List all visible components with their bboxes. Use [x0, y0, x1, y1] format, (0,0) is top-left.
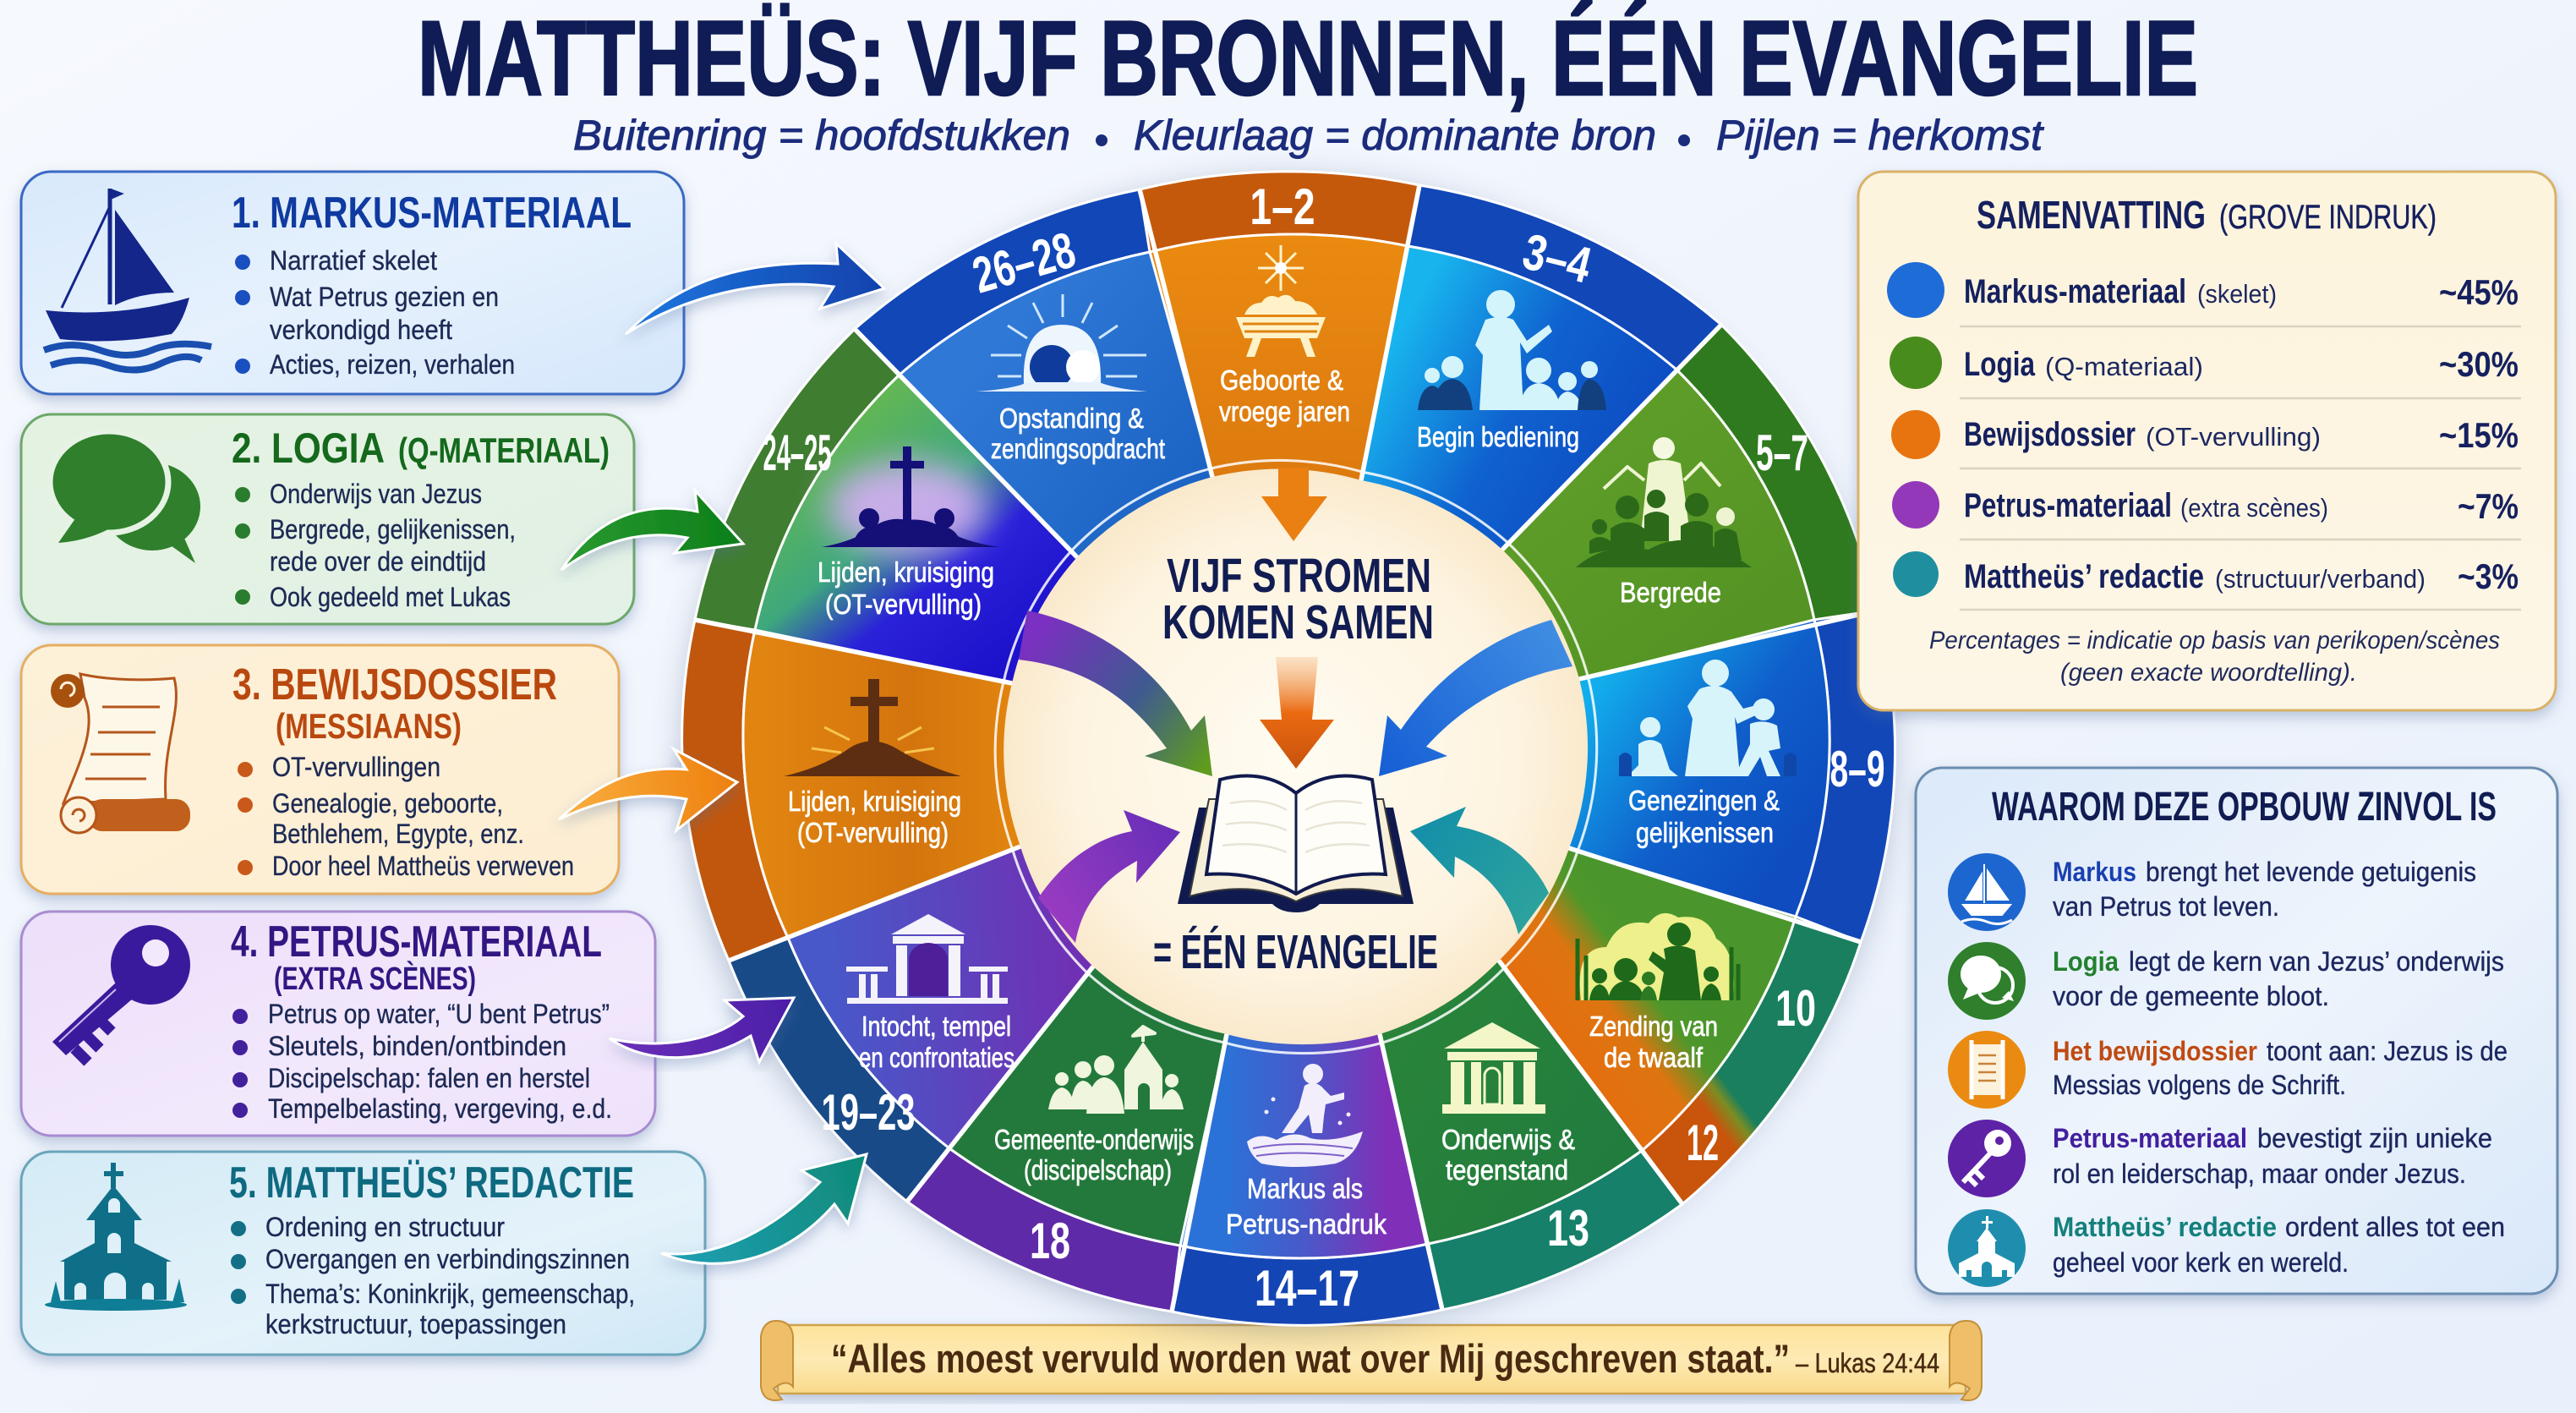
quote source: – Lukas 24:44 — [1796, 1348, 1939, 1378]
bullet list: Ook gedeeld met Lukas — [270, 582, 511, 612]
row: Markus: (skelet) — [2197, 279, 2277, 309]
segment: chapter 18: Gemeente-onderwijs — [994, 1124, 1194, 1155]
bullet list: Petrus op water, “U bent Petrus” — [268, 999, 610, 1029]
segment: chapter 20 (Lijden, orange): (OT-vervulling) — [797, 817, 949, 848]
segment: chapters 14-17: Petrus-nadruk — [1226, 1208, 1386, 1240]
icon: key — [52, 925, 190, 1062]
subtitle: Buitenring = hoofdstukken — [573, 112, 1070, 159]
panel heading: SAMENVATTING — [1977, 193, 2206, 237]
panel: waarom deze opbouw zinvol is — [1916, 768, 2557, 1294]
heading: 5. MATTHEÜS’ REDACTIE — [229, 1158, 634, 1208]
segment: chapters 19-23: Intocht, tempel — [861, 1010, 1011, 1042]
subtitle — [573, 112, 2044, 159]
bullet list — [235, 479, 516, 612]
panel: 5 Mattheüs' redactie — [21, 1152, 705, 1355]
row: Logia: (Q-materiaal) — [2045, 352, 2203, 381]
arrow: Petrus to wheel — [610, 998, 794, 1062]
row: Mattheüs: Mattheüs’ redactie — [1964, 558, 2204, 595]
segment: chapters 5-7: Bergrede — [1620, 577, 1721, 608]
reason: bewijsdossier: Het bewijsdossier — [2053, 1036, 2257, 1066]
note — [1929, 627, 2500, 687]
segment: chapters 10-12: 12 — [1687, 1115, 1719, 1171]
reason: Logia: voor de gemeente bloot. — [2053, 981, 2329, 1011]
bullet list: Overgangen en verbindingszinnen — [265, 1244, 630, 1274]
row: Bewijsdossier: (OT-vervulling) — [2146, 422, 2321, 452]
segment: chapter 13 — [1287, 750, 1682, 1310]
arrow: orange from top — [1261, 468, 1327, 541]
bullet list: Bergrede, gelijkenissen, — [270, 514, 516, 545]
icon: speech bubbles — [50, 431, 200, 563]
heading — [232, 424, 610, 472]
segment: chapter 13: 13 — [1547, 1200, 1589, 1257]
segment: chapters 8-9: Genezingen & — [1628, 785, 1780, 816]
segment: chapters 8-9 — [1287, 611, 1895, 942]
row: Petrus: Petrus-materiaal — [1964, 487, 2172, 524]
panel: 4 Petrus-materiaal — [21, 912, 655, 1136]
bullet list: kerkstructuur, toepassingen — [265, 1309, 566, 1339]
segment: chapters 24-25 — [695, 329, 1287, 750]
reason: Logia: Logia — [2053, 946, 2119, 977]
heading — [231, 917, 602, 997]
row: Logia — [1890, 337, 2519, 389]
bullet list: OT-vervullingen — [272, 752, 440, 782]
segment: chapter 20 (Lijden, orange): Lijden, kruisiging — [788, 786, 961, 817]
reason: Mattheüs: Mattheüs’ redactie — [2053, 1212, 2277, 1242]
bullet list: Acties, reizen, verhalen — [270, 349, 515, 380]
heading: 2. LOGIA — [232, 424, 385, 472]
row: Mattheüs: (structuur/verband) — [2215, 564, 2426, 594]
bullet list: verkondigd heeft — [270, 315, 452, 345]
segment: chapters 1-2: 1–2 — [1250, 178, 1315, 235]
segment: chapters 26-28: Opstanding & — [999, 403, 1144, 434]
arrow: Markus to wheel — [626, 244, 884, 334]
segment: chapters 1-2: vroege jaren — [1219, 396, 1350, 427]
reason: Logia — [1948, 942, 2504, 1020]
reason: Markus: brengt het levende getuigenis — [2146, 857, 2476, 887]
segment: chapter 13: Onderwijs & — [1441, 1124, 1575, 1155]
bullet list: Discipelschap: falen en herstel — [268, 1063, 590, 1093]
reason: bewijsdossier: Messias volgens de Schrift. — [2053, 1070, 2346, 1100]
segment: chapters 24-25: Lijden, kruisiging — [818, 556, 994, 588]
row: Bewijsdossier — [1891, 410, 2519, 459]
arrow: orange centre — [1260, 657, 1334, 769]
segment: chapters 8-9: 8–9 — [1829, 741, 1885, 797]
icon: teacher and listeners — [1418, 290, 1606, 410]
segment: chapter 20 (Lijden, orange) — [682, 620, 1287, 961]
icon: healing scene — [1619, 660, 1797, 776]
segment: chapters 26-28: zendingsopdracht — [991, 433, 1165, 464]
segment: chapters 1-2: Geboorte & — [1220, 364, 1343, 396]
heading: (MESSIAANS) — [276, 706, 462, 746]
row: Markus — [1887, 262, 2519, 318]
reason: Mattheüs — [1948, 1209, 2505, 1287]
subtitle: Kleurlaag = dominante bron — [1134, 112, 1656, 159]
bullet list: Thema’s: Koninkrijk, gemeenschap, — [265, 1279, 635, 1309]
icon: scroll — [51, 674, 190, 833]
segment: chapters 24-25: 24–25 — [763, 424, 832, 481]
segment: chapter 18 — [907, 750, 1287, 1312]
segment: chapter 13: tegenstand — [1446, 1154, 1568, 1186]
inner ring line — [995, 460, 1597, 1054]
bullet list: Genealogie, geboorte, — [272, 788, 503, 819]
reason: Mattheüs: geheel voor kerk en wereld. — [2053, 1247, 2349, 1278]
icon: empty tomb with rays — [976, 294, 1147, 392]
reason: Markus — [1948, 853, 2476, 931]
segment: chapters 24-25: (OT-vervulling) — [825, 589, 982, 620]
row: Petrus: (extra scènes) — [2180, 493, 2328, 523]
icon: temple entrance — [846, 914, 1008, 1004]
row: Petrus — [1892, 481, 2519, 529]
row: Markus: ~45% — [2439, 272, 2519, 312]
bullet list — [232, 999, 612, 1124]
panel heading — [1977, 193, 2437, 237]
icon: mission of the twelve — [1578, 913, 1738, 1000]
segment: chapters 3-4 — [1287, 185, 1721, 750]
bullet list: Sleutels, binden/ontbinden — [268, 1031, 566, 1061]
arrow: purple-green from upper left — [1019, 611, 1212, 776]
panel heading: (GROVE INDRUK) — [2219, 199, 2437, 236]
heading: (Q-MATERIAAL) — [398, 430, 610, 470]
bullet list: Bethlehem, Egypte, enz. — [272, 819, 524, 849]
reason: Markus: van Petrus tot leven. — [2053, 891, 2279, 922]
bullet list: rede over de eindtijd — [270, 546, 486, 577]
row: Logia: ~30% — [2439, 344, 2519, 384]
panel: 2 Logia — [21, 414, 634, 624]
segment: chapters 1-2 — [1140, 172, 1419, 750]
icon: cross with mourners — [822, 446, 1000, 554]
bullet list: Door heel Mattheüs verweven — [272, 851, 574, 881]
segment: chapters 19-23: 19–23 — [822, 1084, 915, 1141]
reason: bewijsdossier — [1948, 1031, 2508, 1109]
arrow: blue from upper right — [1379, 620, 1572, 776]
note: (geen exacte woordtelling). — [2060, 659, 2357, 687]
panel: samenvatting — [1858, 172, 2556, 710]
centre text: vijf stromen: VIJF STROMEN — [1167, 549, 1431, 603]
segment: chapters 14-17: Markus als — [1247, 1173, 1363, 1204]
reason: Mattheüs: ordent alles tot een — [2285, 1212, 2505, 1242]
row: Bewijsdossier: ~15% — [2439, 415, 2519, 455]
icon: Peter walking on water — [1247, 1064, 1363, 1167]
icon: sermon on the mount — [1576, 437, 1752, 567]
arrow: teal from lower right — [1410, 807, 1549, 934]
bullet list — [238, 752, 574, 881]
centre text: vijf stromen — [1162, 549, 1434, 649]
reason: Petrus — [1948, 1120, 2492, 1197]
row: Mattheüs — [1893, 551, 2519, 597]
bullet list: Onderwijs van Jezus — [270, 479, 482, 509]
segment: chapters 8-9: gelijkenissen — [1636, 817, 1774, 848]
reason: Petrus: bevestigt zijn unieke — [2257, 1123, 2492, 1153]
chapter wheel — [682, 172, 1895, 1328]
heading — [232, 660, 557, 746]
icon: star and manger — [1236, 245, 1326, 357]
bullet list — [231, 1212, 635, 1339]
segment: chapters 19-23: en confrontaties — [859, 1042, 1015, 1073]
row: Markus: Markus-materiaal — [1964, 273, 2186, 310]
segment: chapters 5-7: 5–7 — [1756, 424, 1808, 481]
centre text: vijf stromen: KOMEN SAMEN — [1162, 595, 1434, 649]
segment: chapter 18: 18 — [1030, 1213, 1070, 1269]
icon: temple — [1442, 1022, 1545, 1114]
segment: chapters 26-28: 26–28 — [966, 221, 1081, 304]
heading: 4. PETRUS-MATERIAAL — [231, 917, 602, 967]
bullet list: Ordening en structuur — [265, 1212, 505, 1242]
segment: chapters 14-17: 14–17 — [1255, 1260, 1359, 1317]
row: Bewijsdossier: Bewijsdossier — [1964, 416, 2136, 453]
arrow: purple from lower left — [1038, 810, 1180, 943]
centre text: één evangelie: = ÉÉN EVANGELIE — [1153, 925, 1438, 979]
heading: (EXTRA SCÈNES) — [274, 960, 476, 997]
arrow: Mattheüs' redactie to wheel — [661, 1154, 867, 1263]
segment: chapters 10-12: Zending van — [1589, 1010, 1718, 1042]
segment: chapters 10-12: de twaalf — [1604, 1042, 1704, 1073]
centre parchment — [1004, 468, 1588, 1044]
arrow: Logia to wheel — [561, 490, 743, 570]
icon: congregation and church — [1048, 1027, 1184, 1114]
segment: chapters 5-7 — [1287, 325, 1877, 750]
scripture banner — [761, 1321, 1982, 1400]
bullet list: Wat Petrus gezien en — [270, 282, 499, 312]
icon: open book — [1178, 776, 1414, 912]
row: Mattheüs: ~3% — [2458, 556, 2519, 596]
heading: 3. BEWIJSDOSSIER — [232, 660, 557, 709]
panel: 1 Markus-materiaal — [21, 172, 684, 394]
segment: chapters 19-23 — [729, 750, 1287, 1202]
heading: 1. MARKUS-MATERIAAL — [232, 189, 632, 238]
quote: “Alles moest vervuld worden wat over Mij geschreven staat.” — [831, 1336, 1790, 1381]
reason: Markus: Markus — [2053, 857, 2136, 887]
icon: cross on hill — [784, 679, 961, 776]
segment: chapters 3-4: 3–4 — [1518, 222, 1597, 294]
row: Petrus: ~7% — [2458, 486, 2519, 526]
reason: Petrus: Petrus-materiaal — [2053, 1123, 2247, 1153]
segment: chapters 14-17 — [1172, 750, 1442, 1325]
segment: chapters 10-12: 10 — [1775, 980, 1816, 1037]
reason: bewijsdossier: toont aan: Jezus is de — [2267, 1036, 2508, 1066]
segment: chapters 26-28 — [855, 189, 1287, 750]
subtitle: Pijlen = herkomst — [1716, 112, 2044, 159]
row: Logia: Logia — [1964, 346, 2036, 383]
arrow: Bewijsdossier to wheel — [559, 749, 737, 830]
bullet list: Narratief skelet — [270, 245, 437, 276]
bullet list — [235, 245, 515, 380]
reason: Petrus: rol en leiderschap, maar onder Jezus. — [2053, 1158, 2466, 1189]
segment: chapters 10-12 — [1287, 750, 1861, 1204]
segment: chapter 18: (discipelschap) — [1024, 1154, 1172, 1186]
reason: Logia: legt de kern van Jezus’ onderwijs — [2129, 946, 2504, 977]
icon: sailing boat — [44, 189, 211, 370]
segment: chapters 3-4: Begin bediening — [1417, 421, 1579, 452]
note: Percentages = indicatie op basis van perikopen/scènes — [1929, 627, 2500, 654]
icon: church — [45, 1163, 187, 1311]
bullet list: Tempelbelasting, vergeving, e.d. — [268, 1093, 612, 1124]
panel: 3 Bewijsdossier — [21, 645, 619, 894]
